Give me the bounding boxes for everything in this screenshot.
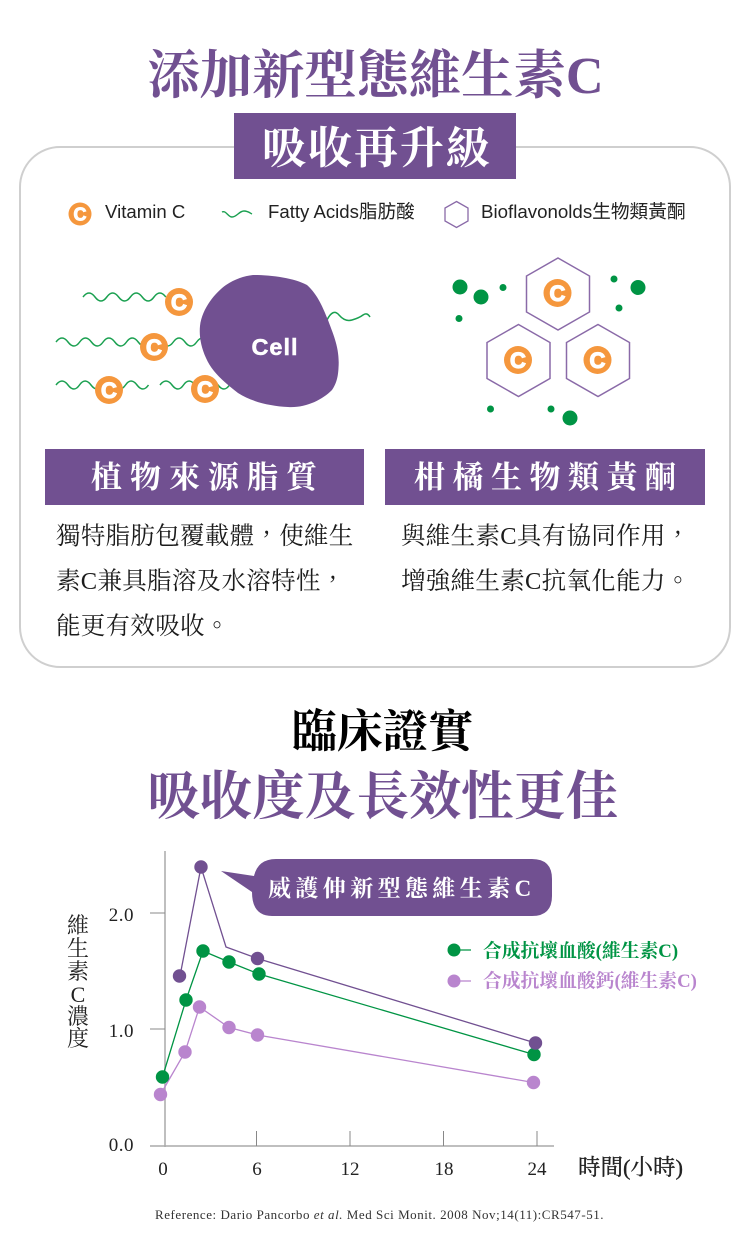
text block: citrus bioflavonoids: 與維生素C具有協同作用，: [401, 522, 690, 550]
callout: [221, 859, 552, 916]
diagram: cell and fatty acids: [56, 275, 370, 407]
y axis label: 維: [67, 913, 89, 938]
chart legend: [448, 940, 697, 992]
series: purple product: [173, 860, 542, 1050]
text block: plant lipid: 獨特脂肪包覆載體，使維生: [56, 522, 354, 550]
subtitle banner: 吸收再升級: [262, 124, 492, 173]
icon: vitamin C: [68, 202, 92, 226]
x tick labels: 0: [158, 1159, 168, 1180]
icon: vitamin C inside hexagons: C: [550, 281, 566, 306]
subtitle banner: [234, 113, 516, 179]
panel: absorption upgrade: [20, 147, 730, 667]
y axis label: [67, 913, 89, 1051]
icon: vitamin C molecules: C: [171, 290, 187, 315]
x tick labels: 18: [434, 1159, 454, 1180]
icon: vitamin C inside hexagons: [504, 279, 612, 374]
text block: citrus bioflavonoids: 增強維生素C抗氧化能力。: [401, 567, 690, 595]
callout: 威護伸新型態維生素C: [268, 876, 536, 901]
heading: citrus bioflavonoids: 柑橘生物類黃酮: [414, 460, 684, 495]
icon: cell: Cell: [251, 334, 299, 360]
line chart: [67, 851, 697, 1180]
icon: fatty acid wave: [222, 211, 252, 217]
icon: green particles: [452, 276, 646, 426]
y axis label: 度: [67, 1026, 89, 1051]
text block: citrus bioflavonoids: [401, 522, 690, 595]
icon: vitamin C molecules: [95, 288, 219, 404]
diagram: bioflavonoid hexagons: [452, 258, 646, 426]
y tick labels: 0.0: [109, 1135, 134, 1156]
legend label: vitamin C: Vitamin C: [105, 201, 185, 222]
icon: hexagon: [445, 202, 468, 228]
y axis label: 素: [67, 959, 89, 984]
text block: plant lipid: 能更有效吸收。: [56, 612, 230, 640]
legend item: calcium ascorbate: 合成抗壞血酸鈣(維生素C): [483, 970, 697, 992]
icon: cell: [200, 275, 339, 407]
heading: plant lipid: [45, 449, 364, 505]
icon: vitamin C inside hexagons: C: [510, 348, 526, 373]
text block: plant lipid: 素C兼具脂溶及水溶特性，: [56, 567, 345, 595]
x tick labels: 6: [252, 1159, 262, 1180]
icon: vitamin C inside hexagons: C: [590, 348, 606, 373]
icon: vitamin C: C: [74, 204, 86, 224]
series: green ascorbic acid: [156, 944, 541, 1084]
y tick labels: 1.0: [109, 1021, 134, 1042]
x tick labels: 12: [340, 1159, 360, 1180]
y axis label: 生: [67, 936, 89, 961]
y axis label: C: [71, 982, 85, 1007]
y axis label: 濃: [67, 1004, 89, 1029]
legend: ingredient key: [68, 201, 686, 228]
axes and ticks: [150, 851, 554, 1147]
legend item: ascorbic acid: 合成抗壞血酸(維生素C): [483, 940, 678, 962]
legend label: bioflavonoids: Bioflavonolds生物類黃酮: [481, 201, 686, 222]
icon: vitamin C molecules: C: [146, 335, 162, 360]
heading: better absorption: 吸收度及長效性更佳: [148, 768, 618, 826]
heading: citrus bioflavonoids: [385, 449, 705, 505]
heading: plant lipid: 植物來源脂質: [91, 460, 325, 495]
reference note: Reference: Dario Pancorbo et al. Med Sci Monit. 2008 Nov;14(11):CR547-51.: [155, 1207, 604, 1222]
y tick labels: 2.0: [109, 905, 134, 926]
x axis title: 時間(小時): [578, 1155, 683, 1180]
title: 添加新型態維生素C: [148, 47, 604, 105]
text block: plant lipid: [56, 522, 354, 640]
x tick labels: 24: [528, 1159, 547, 1180]
series: light purple calcium ascorbate: [154, 1000, 540, 1101]
icon: vitamin C molecules: C: [101, 378, 117, 403]
x tick labels: [158, 1159, 547, 1180]
y tick labels: [109, 905, 134, 1156]
icon: vitamin C molecules: C: [197, 377, 213, 402]
legend label: fatty acids: Fatty Acids脂肪酸: [268, 201, 415, 222]
heading: clinical proof: 臨床證實: [292, 706, 477, 757]
